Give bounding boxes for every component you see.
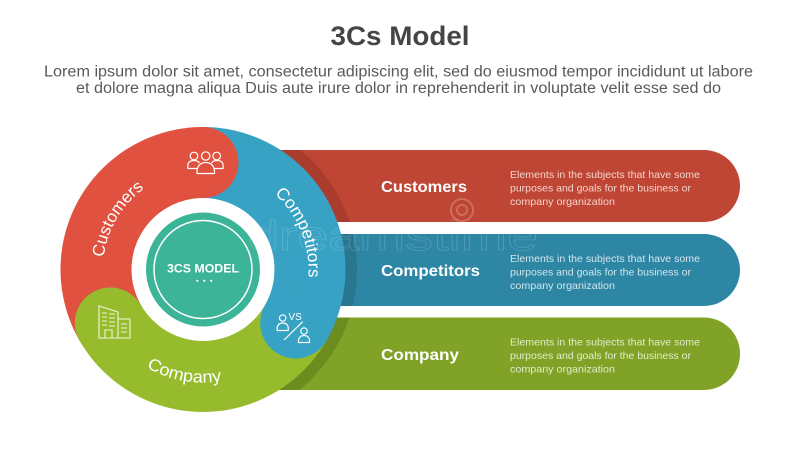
company bar description: Elements in the subjects that have some xyxy=(510,336,700,348)
competitors bar description: company organization xyxy=(510,280,615,292)
company bar heading: Company xyxy=(381,347,459,364)
segment: customers body xyxy=(61,127,203,341)
subtitle text: Lorem ipsum dolor sit amet, consectetur adipiscing elit, sed do eiusmod tempor incididunt ut labore xyxy=(44,64,753,80)
segment head: company xyxy=(75,288,146,358)
segment: competitors body xyxy=(203,127,345,341)
customers bar description: Elements in the subjects that have some xyxy=(510,169,700,181)
customers bar description: purposes and goals for the business or xyxy=(510,182,691,194)
panel: company bar xyxy=(279,318,740,390)
center badge dots xyxy=(196,280,212,282)
competitors bar description xyxy=(510,253,700,292)
segment head: customers xyxy=(168,127,238,198)
subtitle text: et dolore magna aliqua Duis aute irure dolor in reprehenderit in voluptate velit esse sed do xyxy=(76,80,721,97)
segment head: competitors xyxy=(260,288,331,358)
curved label: company: Company xyxy=(149,359,221,386)
company bar description: company organization xyxy=(510,364,615,376)
icon: competitors versus xyxy=(277,312,310,342)
customers bar description: company organization xyxy=(510,196,615,208)
customers bar heading: Customers xyxy=(381,179,467,196)
icon text: vs: VS xyxy=(288,312,302,323)
icon: customers group xyxy=(188,152,223,174)
panel: customers bar xyxy=(280,150,740,222)
curved label: customers: Customers xyxy=(92,182,143,256)
segment: company body xyxy=(80,305,326,412)
competitors bar description: purposes and goals for the business or xyxy=(510,266,691,278)
watermark xyxy=(248,199,538,259)
customers bar description xyxy=(510,169,700,208)
icon: company buildings xyxy=(99,306,130,338)
title: 3Cs Model xyxy=(330,21,470,51)
curved label: competitors: Competitors xyxy=(277,188,318,277)
company bar description xyxy=(510,336,700,376)
circular diagram xyxy=(60,127,346,412)
panel: competitors bar xyxy=(340,234,740,306)
competitors bar heading: Competitors xyxy=(381,263,480,280)
company bar description: purposes and goals for the business or xyxy=(510,350,691,362)
competitors bar description: Elements in the subjects that have some xyxy=(510,253,700,265)
inner white disc xyxy=(131,198,275,342)
center badge xyxy=(146,212,260,326)
watermark: dreamstime xyxy=(248,212,538,259)
center badge label: 3CS MODEL xyxy=(167,262,239,276)
subtitle text xyxy=(44,64,753,97)
